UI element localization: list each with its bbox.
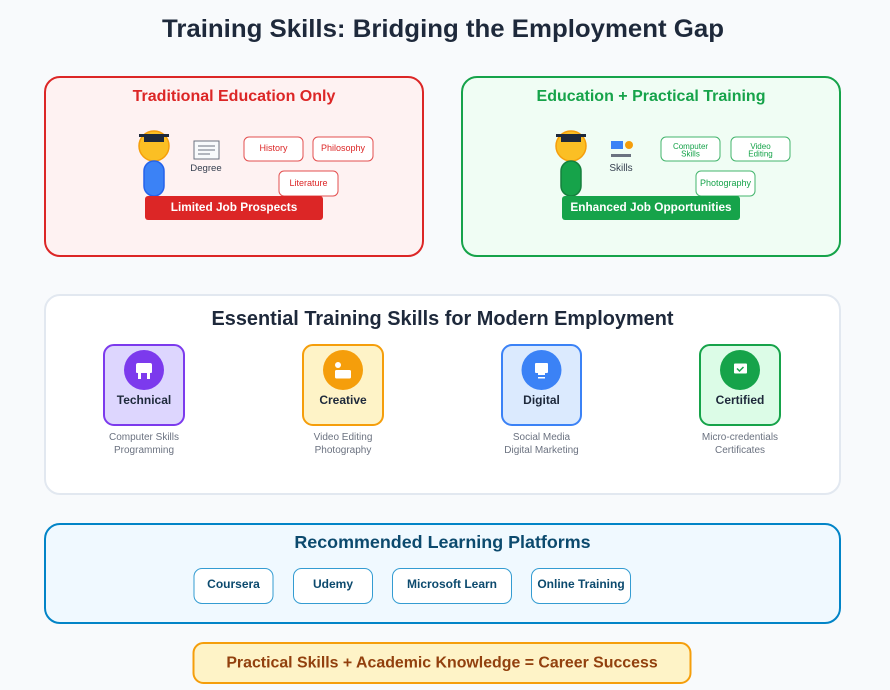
panel: learning platforms [45, 524, 840, 623]
icon: degree [190, 141, 222, 174]
button: coursera [194, 568, 273, 604]
button: microsoft learn: Microsoft Learn [407, 577, 497, 591]
button: udemy [294, 568, 372, 604]
card: digital [502, 345, 581, 456]
panel: education plus training [462, 77, 840, 256]
button: microsoft learn [392, 568, 512, 604]
card: creative [303, 345, 383, 456]
card: certified [700, 345, 780, 456]
heading: learning platforms: Recommended Learning Platforms [294, 532, 591, 552]
tag: history: History [259, 143, 288, 153]
panel: traditional education [45, 77, 423, 256]
banner: enhanced job opportunities: Enhanced Job Opportunities [570, 200, 732, 214]
tag: video editing [731, 137, 790, 161]
tag: computer skills: Skills [681, 150, 700, 158]
callout: career success [194, 643, 690, 683]
card: technical [104, 345, 184, 456]
card: creative: Video Editing [314, 432, 372, 443]
tag: literature [279, 171, 338, 196]
tag: philosophy [313, 137, 373, 161]
card: technical: Computer Skills [109, 432, 179, 443]
tag: computer skills [661, 137, 720, 161]
card: technical: Technical [117, 393, 171, 407]
button: coursera: Coursera [207, 577, 260, 591]
card: technical: Programming [114, 445, 174, 456]
tag: video editing: Video [750, 142, 771, 151]
banner: enhanced job opportunities [562, 196, 740, 220]
card: creative: Creative [319, 393, 367, 407]
panel: essential skills [45, 295, 840, 494]
callout: career success: Practical Skills + Academic Knowledge = Career Success [226, 654, 658, 672]
icon: skills: Skills [609, 163, 633, 174]
icon: graduate figure green [556, 131, 586, 196]
tag: philosophy: Philosophy [321, 143, 366, 153]
tag: video editing: Editing [748, 150, 773, 158]
button: online training [532, 568, 630, 604]
tag: history [244, 137, 303, 161]
tag: photography: Photography [700, 178, 752, 188]
banner: limited job prospects: Limited Job Prospects [171, 200, 298, 214]
heading: traditional education: Traditional Education Only [133, 88, 335, 105]
banner: limited job prospects [145, 196, 323, 220]
title: Training Skills: Bridging the Employment Gap [162, 15, 724, 43]
button: udemy: Udemy [313, 577, 353, 591]
heading: education plus training: Education + Practical Training [537, 88, 765, 105]
button: online training: Online Training [537, 577, 625, 591]
tag: literature: Literature [289, 178, 328, 188]
tag: computer skills: Computer [673, 142, 708, 151]
card: certified: Certificates [715, 445, 765, 456]
card: certified: Certified [716, 393, 764, 407]
heading: essential skills: Essential Training Skills for Modern Employment [211, 308, 674, 330]
icon: skills [609, 141, 633, 174]
tag: photography [696, 171, 755, 196]
card: digital: Digital [523, 393, 560, 407]
card: digital: Social Media [513, 432, 571, 443]
card: certified: Micro-credentials [702, 432, 778, 443]
icon: graduate figure [139, 131, 169, 196]
card: creative: Photography [315, 445, 371, 456]
icon: degree: Degree [190, 163, 222, 174]
card: digital: Digital Marketing [504, 445, 579, 456]
